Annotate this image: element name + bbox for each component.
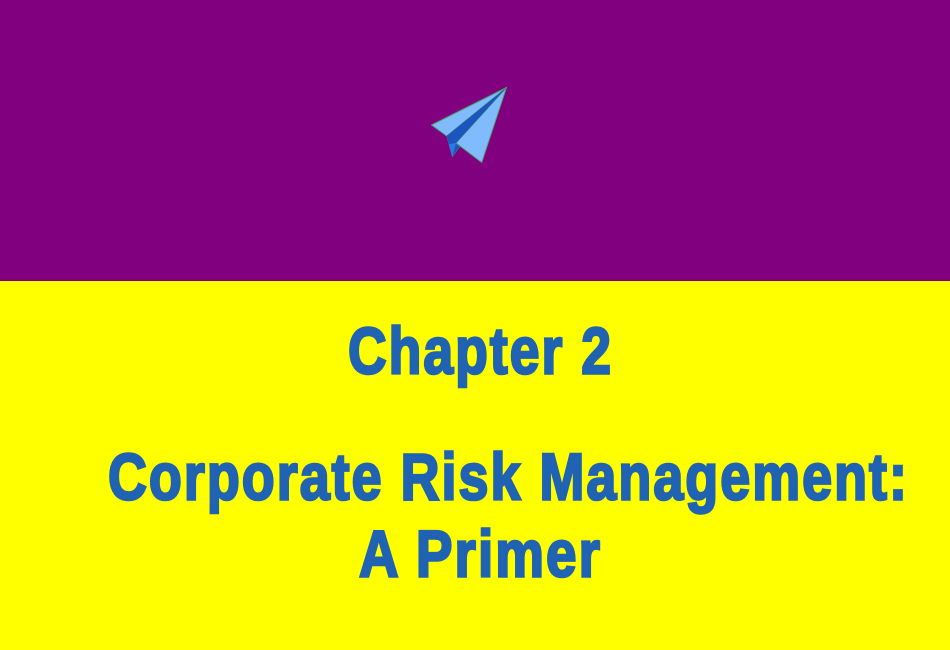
heading: chapter title: A Primer [359,516,602,590]
heading: chapter title [108,440,909,590]
panel: yellow bottom band [0,281,950,650]
heading: chapter number: Chapter 2 [348,314,613,388]
panel: purple top band [0,0,950,281]
icon: paper plane [432,88,506,162]
